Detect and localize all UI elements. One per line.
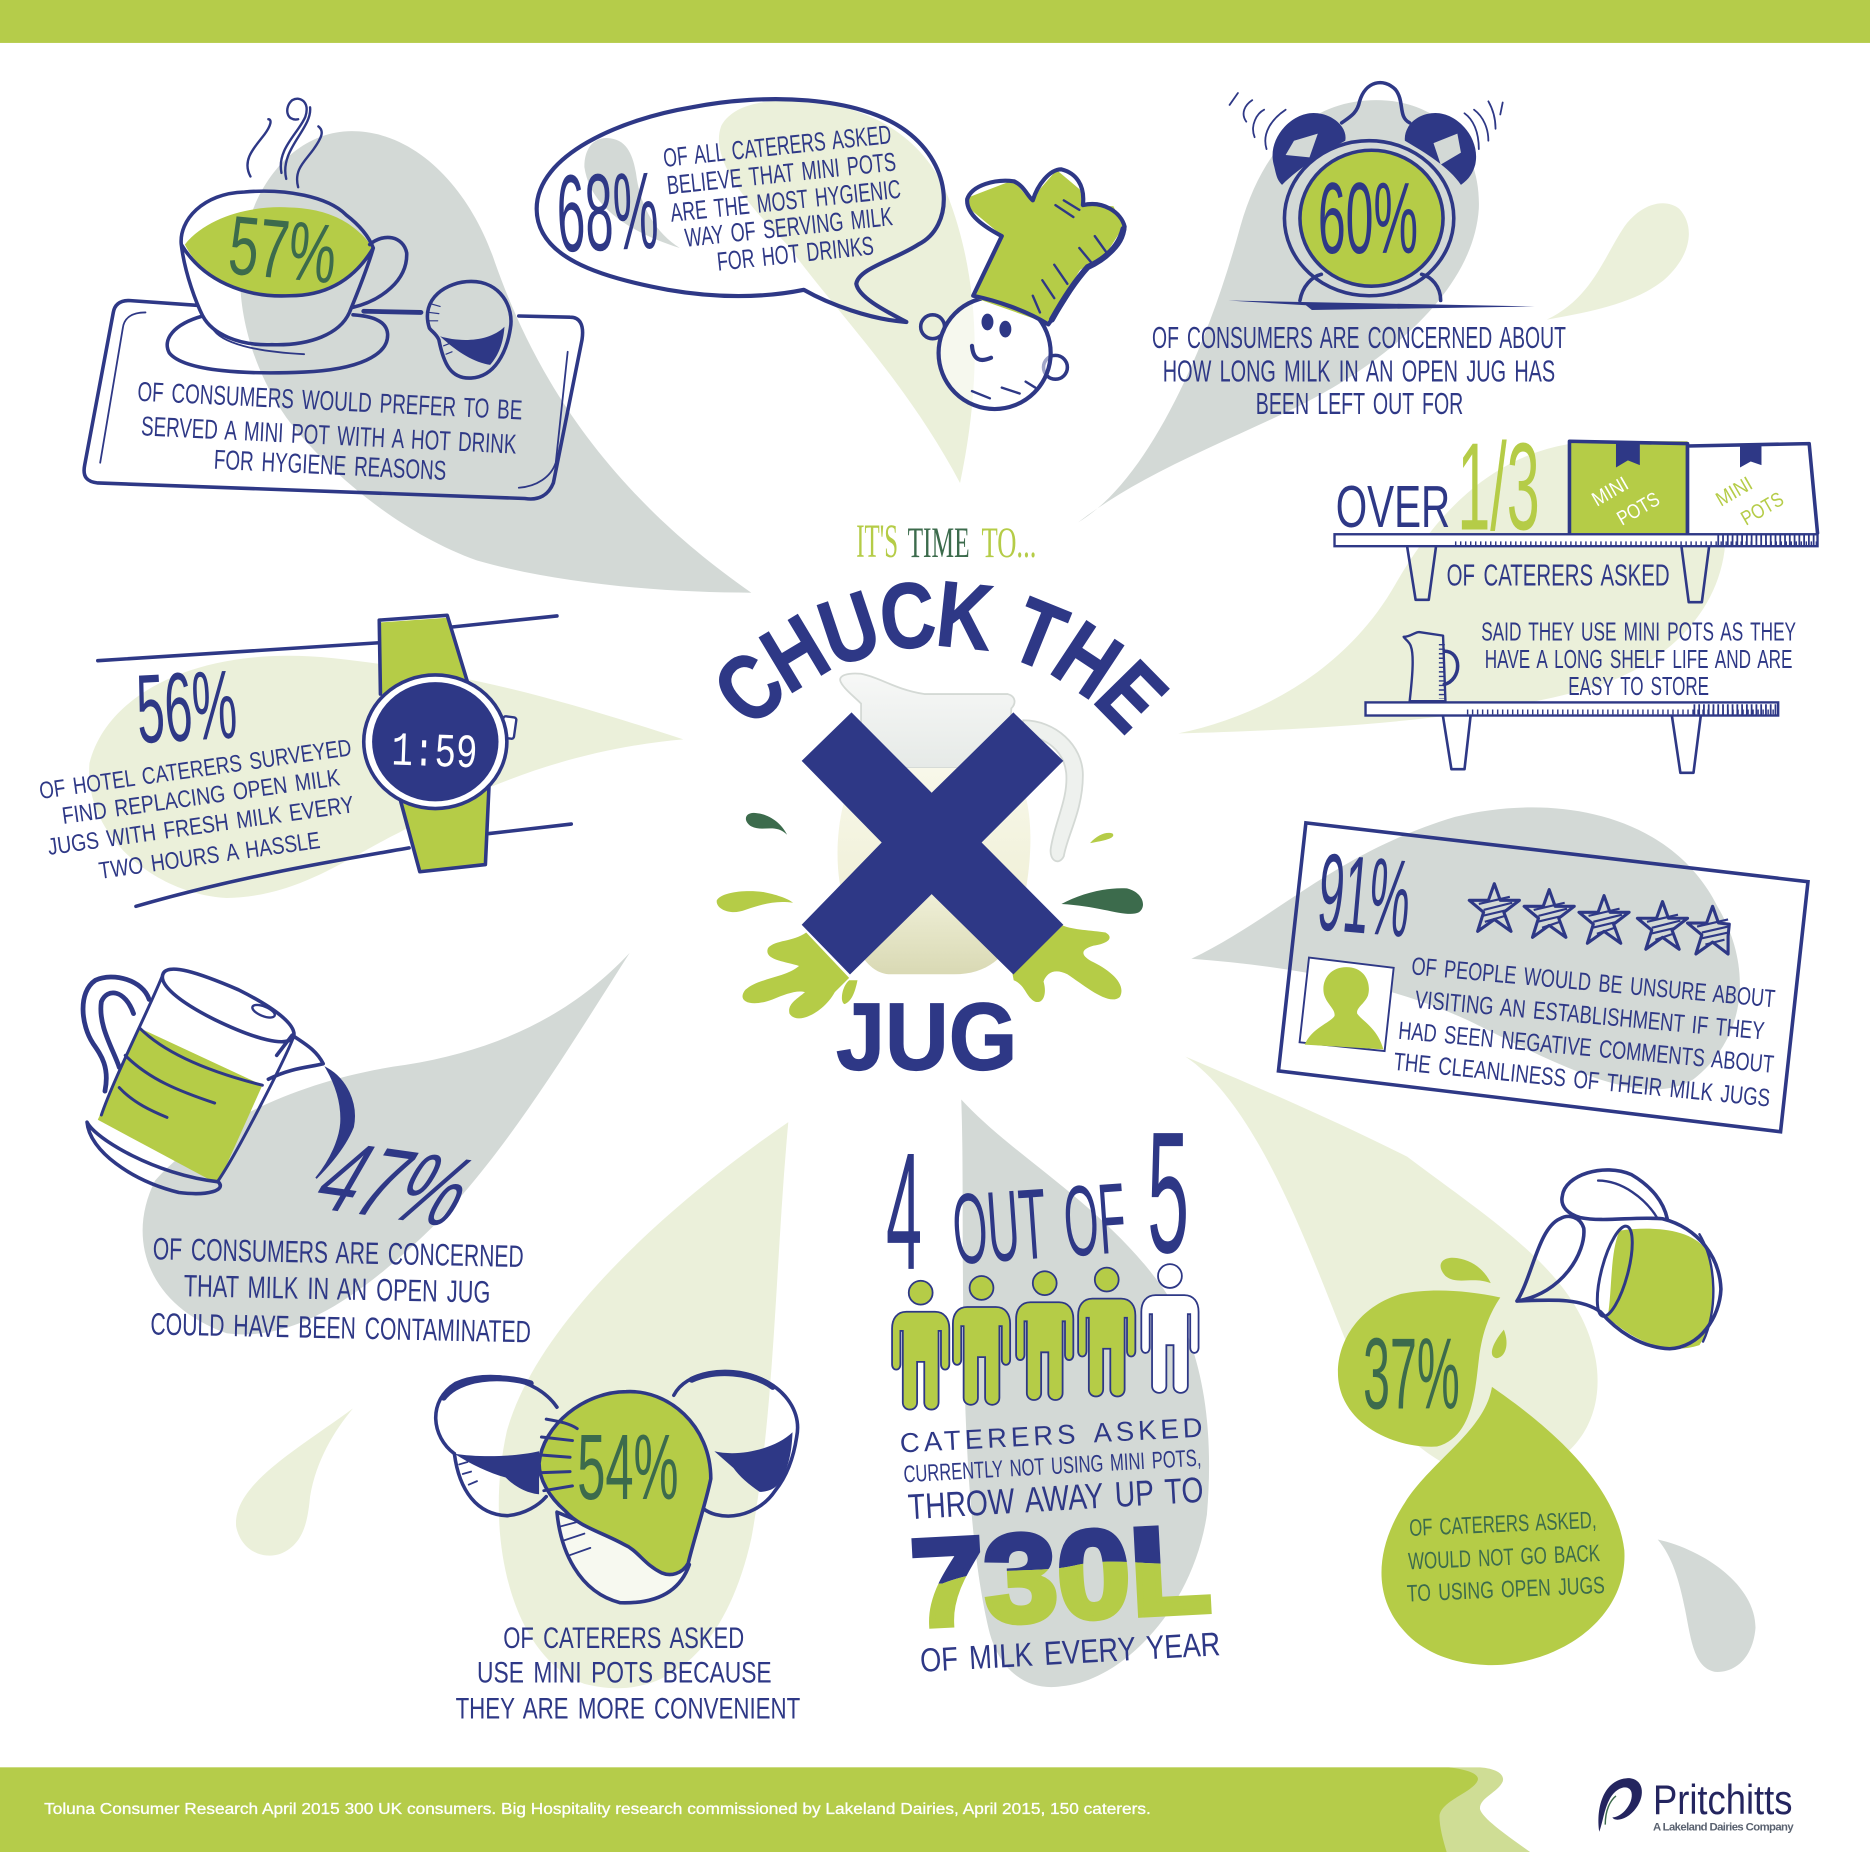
panel: 37% pouring jug bbox=[1338, 1170, 1721, 1665]
footer source text: Toluna Consumer Research April 2015 300 UK consumers. Big Hospitality research commissioned by Lakeland Dairies, April 2015, 150 caterers. bbox=[44, 1801, 1151, 1818]
text: pour caption: OF CATERERS ASKED, bbox=[1409, 1507, 1597, 1542]
icon: left mini pot bbox=[436, 1377, 557, 1516]
text: mini pots caption: THEY ARE MORE CONVENIENT bbox=[456, 1692, 800, 1725]
text: clock caption bbox=[1152, 320, 1566, 421]
panel: 68% speech bubble: 68% bbox=[555, 150, 660, 276]
icon: cup bbox=[181, 191, 407, 354]
text: jug caption: THAT MILK IN AN OPEN JUG bbox=[184, 1268, 491, 1310]
panel: 91% review card bbox=[1278, 823, 1808, 1132]
heading: it's time to: TO... bbox=[982, 520, 1036, 567]
icon: upper shelf bbox=[1335, 534, 1818, 602]
panel: 47% jug bbox=[83, 969, 531, 1349]
text: bubble caption bbox=[662, 119, 902, 277]
small green droplets bbox=[1441, 1258, 1507, 1358]
icon: white mini pots box: MINI bbox=[1712, 473, 1756, 511]
icon: splashes bbox=[717, 813, 1143, 1018]
text: of milk every year: OF MILK EVERY YEAR bbox=[919, 1626, 1221, 1680]
heading: chuck the bbox=[694, 562, 1186, 751]
stat: 730L: 730L bbox=[908, 1500, 1214, 1654]
heading: it's time to: TIME bbox=[908, 520, 970, 567]
icon: watch bbox=[364, 615, 517, 872]
stat: 57%: 57% bbox=[225, 197, 341, 301]
panel: central title bbox=[694, 515, 1186, 1091]
heading: chuck the: U bbox=[807, 571, 892, 687]
text: of caterers asked: OF CATERERS ASKED bbox=[1447, 558, 1670, 593]
text: bubble caption: FOR HOT DRINKS bbox=[715, 230, 875, 277]
big green drop bbox=[1381, 1387, 1624, 1665]
heading: 4 out of 5 bbox=[886, 1095, 1189, 1305]
heading: chuck the: C bbox=[875, 562, 940, 671]
stat: 56%: 56% bbox=[134, 649, 239, 764]
stat: 730L bbox=[911, 1525, 1212, 1629]
icon: chef bbox=[921, 169, 1125, 409]
panel: 4 out of 5 bbox=[886, 1095, 1221, 1680]
text: shelf caption: EASY TO STORE bbox=[1568, 671, 1709, 701]
icon: centre mini pot bbox=[539, 1392, 711, 1603]
heading: chuck the: C bbox=[694, 632, 805, 745]
stat: 730L: 730L bbox=[908, 1500, 1214, 1654]
panel: 60% alarm clock bbox=[1152, 83, 1566, 421]
small drop in bubble bbox=[584, 138, 680, 248]
text: caterers asked: THROW AWAY UP TO bbox=[907, 1470, 1204, 1527]
text: mini pots caption: OF CATERERS ASKED bbox=[503, 1622, 744, 1655]
panel: 54% mini pots bbox=[436, 1371, 800, 1725]
text: caterers asked: CATERERS ASKED bbox=[899, 1412, 1203, 1458]
heading: chuck the: H bbox=[1035, 602, 1139, 719]
text: watch caption: OF HOTEL CATERERS SURVEYED bbox=[38, 734, 353, 805]
panel: 37% pouring jug: 37% bbox=[1363, 1317, 1460, 1430]
heading: chuck the: T bbox=[998, 578, 1080, 692]
heading: it's time to: IT'S bbox=[856, 515, 898, 568]
text: clock caption: HOW LONG MILK IN AN OPEN JUG HAS bbox=[1163, 354, 1555, 389]
text: bubble caption: ARE THE MOST HYGIENIC bbox=[669, 174, 902, 228]
icon: saucer bbox=[167, 315, 388, 373]
panel: 68% speech bubble bbox=[537, 99, 944, 322]
icon: steam bbox=[247, 99, 322, 187]
icon: wrist lines bbox=[98, 616, 571, 906]
stat: 54%: 54% bbox=[577, 1415, 679, 1519]
icon: small jug bbox=[1404, 632, 1458, 701]
panel: over 1/3 shelves bbox=[1335, 418, 1818, 773]
icon: stars bbox=[1469, 884, 1729, 954]
icon: big X bbox=[802, 712, 1063, 975]
text: cup caption: SERVED A MINI POT WITH A HOT DRINK bbox=[140, 410, 517, 460]
heading: chuck the: K bbox=[932, 562, 998, 671]
icon: white mini pots box: POTS bbox=[1737, 489, 1788, 530]
text: shelf caption bbox=[1481, 616, 1796, 701]
text: watch caption: JUGS WITH FRESH MILK EVERY bbox=[46, 791, 356, 861]
text: clock caption: BEEN LEFT OUT FOR bbox=[1256, 386, 1463, 421]
icon: card outline bbox=[84, 301, 583, 499]
text: pour caption: WOULD NOT GO BACK bbox=[1408, 1540, 1601, 1575]
text: cup caption bbox=[137, 376, 523, 486]
icon: milk jug bbox=[838, 673, 1083, 974]
icon: lower shelf bbox=[1366, 702, 1778, 773]
text: mini pots caption: USE MINI POTS BECAUSE bbox=[477, 1657, 772, 1690]
icon: swirl bbox=[1598, 1778, 1642, 1832]
text: watch caption: FIND REPLACING OPEN MILK bbox=[60, 764, 342, 830]
icon: watch: 1:59 bbox=[391, 725, 478, 782]
text: Pritchitts: Pritchitts bbox=[1653, 1776, 1792, 1823]
heading: over 1/3: OVER bbox=[1336, 473, 1450, 540]
text: jug caption: COULD HAVE BEEN CONTAMINATED bbox=[150, 1306, 531, 1349]
panel: 57% cup bbox=[84, 99, 583, 499]
panel: 60% alarm clock: 60% bbox=[1318, 162, 1418, 275]
icon: green mini pots box: MINI bbox=[1588, 473, 1632, 511]
text: mini pots caption bbox=[456, 1622, 800, 1725]
text: pour caption bbox=[1406, 1507, 1605, 1608]
icon: alarm clock bbox=[1228, 83, 1535, 310]
icon: person 5 bbox=[1141, 1264, 1199, 1393]
icon: tilted jug bbox=[83, 969, 323, 1194]
heading: 4 out of 5: OUT OF bbox=[949, 1162, 1129, 1286]
text: watch caption bbox=[38, 734, 356, 885]
icon: avatar bbox=[1300, 958, 1394, 1051]
heading: it's time to bbox=[856, 515, 1036, 568]
text: watch caption: TWO HOURS A HASSLE bbox=[97, 827, 322, 885]
text: cup caption: OF CONSUMERS WOULD PREFER TO BE bbox=[137, 376, 523, 425]
icon: green mini pots box bbox=[1569, 441, 1688, 533]
text: bubble caption: BELIEVE THAT MINI POTS bbox=[665, 146, 897, 200]
heading: 4 out of 5: 4 bbox=[886, 1119, 922, 1305]
text: review caption bbox=[1392, 952, 1776, 1113]
heading: chuck the: H bbox=[745, 596, 846, 713]
icon: pouring jug bbox=[1517, 1170, 1721, 1349]
icon: mini pot bbox=[427, 281, 511, 378]
text: caterers asked: CURRENTLY NOT USING MINI POTS, bbox=[903, 1445, 1202, 1488]
text: clock caption: OF CONSUMERS ARE CONCERNED ABOUT bbox=[1152, 320, 1566, 355]
text: jug caption bbox=[150, 1231, 531, 1349]
logo: Pritchitts bbox=[1598, 1776, 1794, 1834]
speech bubble outline bbox=[537, 99, 944, 322]
icon: white mini pots box bbox=[1688, 444, 1818, 533]
icon: person 2 bbox=[953, 1276, 1010, 1405]
panel: 4 out of 5: 5 bbox=[1147, 1095, 1189, 1289]
text: caterers asked bbox=[899, 1412, 1204, 1527]
text: tagline: A Lakeland Dairies Company bbox=[1653, 1822, 1794, 1834]
heading: jug: JUG bbox=[836, 985, 1017, 1091]
icon: green mini pots box: POTS bbox=[1613, 489, 1664, 530]
background teardrop shapes bbox=[89, 100, 1756, 1688]
text: bubble caption: WAY OF SERVING MILK bbox=[683, 201, 894, 253]
heading: over 1/3 bbox=[1336, 418, 1540, 556]
text: bubble caption: OF ALL CATERERS ASKED bbox=[662, 119, 893, 173]
text: jug caption: OF CONSUMERS ARE CONCERNED bbox=[153, 1231, 524, 1274]
review card outline bbox=[1278, 823, 1808, 1132]
panel: over 1/3 shelves: 1/3 bbox=[1457, 418, 1540, 556]
icon: person 4 bbox=[1078, 1268, 1135, 1396]
heading: chuck the: E bbox=[1076, 642, 1186, 751]
icon: person 3 bbox=[1016, 1271, 1073, 1400]
green drop with 37% bbox=[1338, 1291, 1500, 1447]
stat: 47%: 47% bbox=[296, 1123, 495, 1247]
footer band bbox=[0, 1767, 1530, 1852]
text: cup caption: FOR HYGIENE REASONS bbox=[213, 444, 447, 486]
icon: right mini pot bbox=[674, 1371, 798, 1516]
panel: 56% watch bbox=[38, 615, 571, 906]
panel: 91% review card: 91% bbox=[1313, 831, 1415, 961]
text: pour caption: TO USING OPEN JUGS bbox=[1406, 1572, 1605, 1608]
icon: pour stream bbox=[316, 1069, 354, 1178]
top band bbox=[0, 0, 1870, 43]
icon: person 1 bbox=[892, 1281, 949, 1410]
